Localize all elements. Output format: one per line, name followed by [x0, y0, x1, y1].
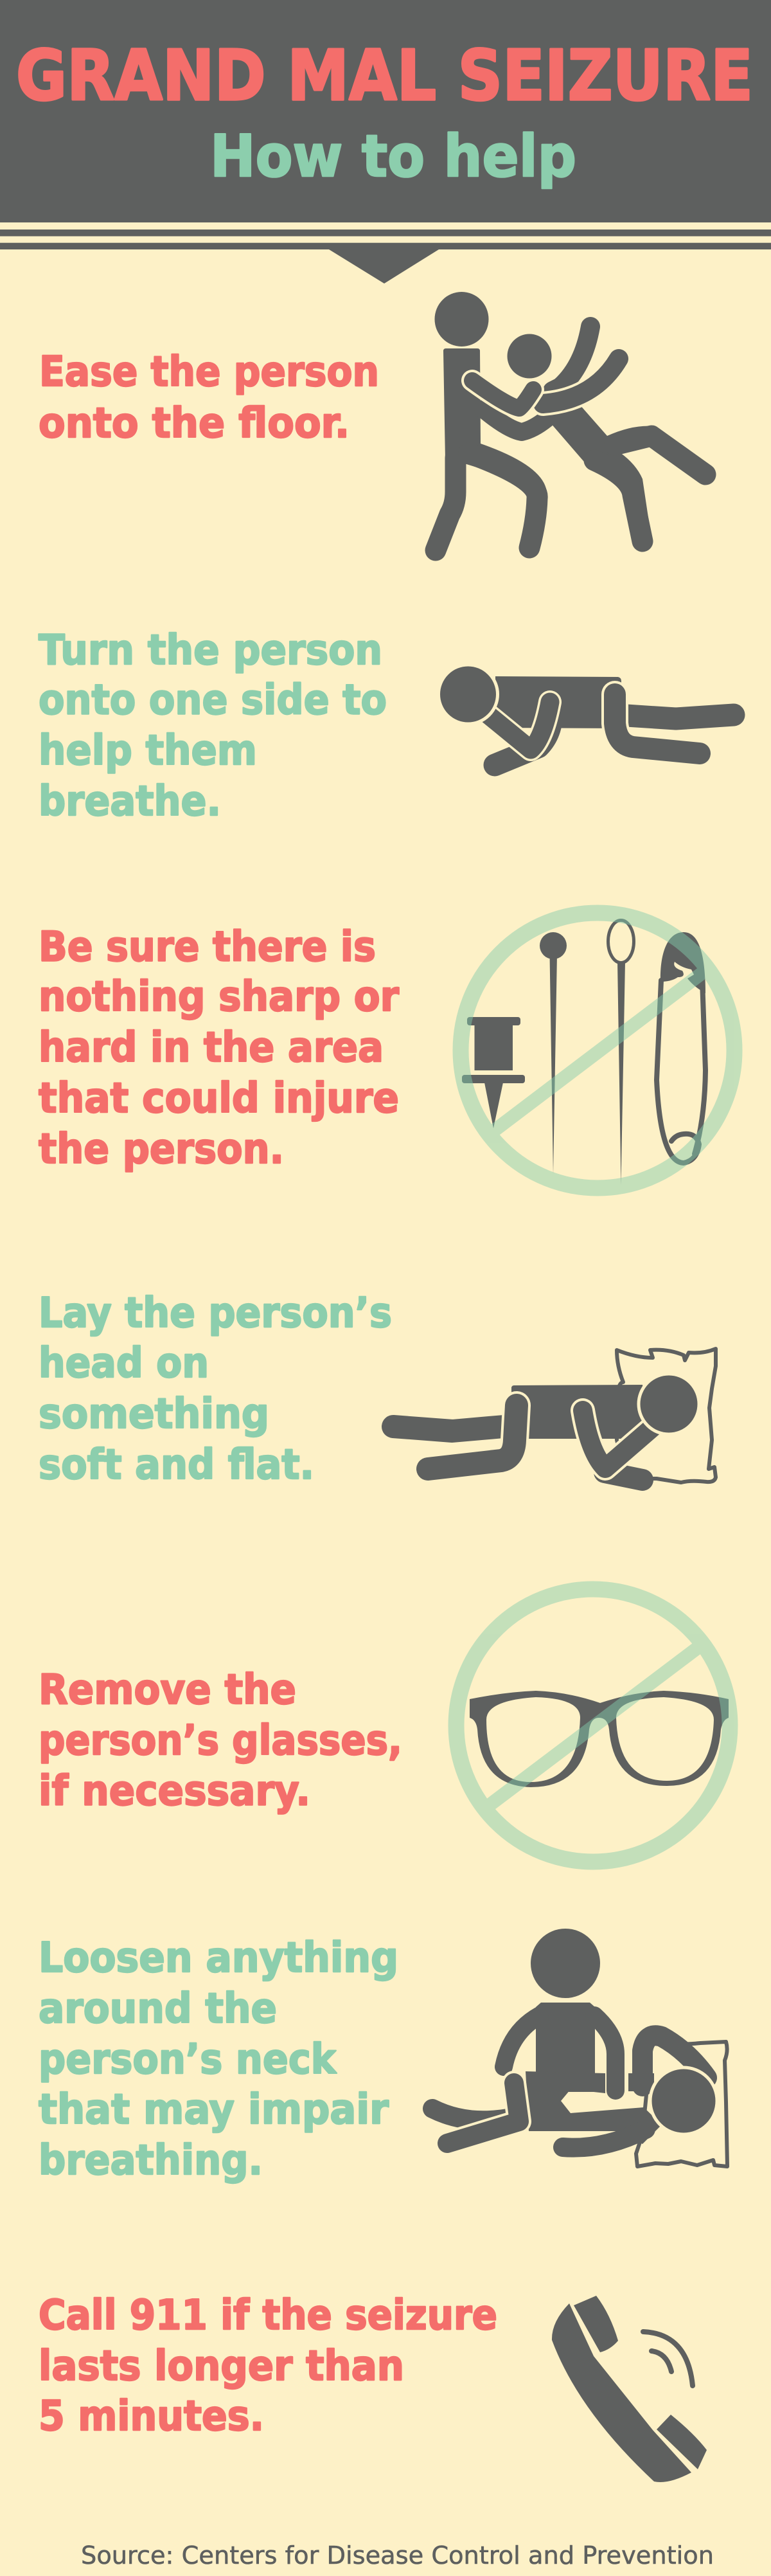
text: step 5: if necessary.: [39, 1768, 310, 1815]
source line: Source: Centers for Disease Control and Prevention: [81, 2541, 714, 2570]
text: step 1: [39, 348, 379, 447]
text: step 1: onto the floor.: [39, 400, 350, 447]
icon: hoop needle: [608, 921, 634, 1185]
icon: helper kneeling beside person on pillow: [432, 1929, 727, 2166]
icon: glasses crossed out: [456, 1589, 730, 1862]
text: step 2: Turn the person: [39, 627, 382, 674]
icon: telephone handset: [552, 2296, 707, 2482]
panel: step 3, nothing sharp or hard: [39, 913, 734, 1188]
text: step 6: Loosen anything: [39, 1934, 398, 1982]
text: step 2: help them: [39, 727, 257, 775]
icon: safety pin: [657, 932, 705, 1163]
text: step 2: onto one side to: [39, 676, 387, 724]
text: step 3: the person.: [39, 1126, 284, 1173]
text: step 5: Remove the: [39, 1666, 296, 1714]
header banner: [0, 0, 771, 284]
text: step 2: breathe.: [39, 778, 221, 825]
panel: step 6, loosen around the neck: [39, 1929, 727, 2184]
text: step 7: [39, 2292, 497, 2440]
icon: person lying with head on pillow: [393, 1349, 716, 1482]
text: step 3: nothing sharp or: [39, 973, 399, 1021]
text: step 7: lasts longer than: [39, 2343, 404, 2390]
icon: person easing another person down: [434, 292, 713, 550]
text: step 5: person’s glasses,: [39, 1717, 402, 1765]
icon: pillow: [636, 2042, 727, 2166]
panel: step 1, ease onto the floor: [39, 292, 713, 550]
icon: pillow: [616, 1349, 716, 1482]
icon: prohibition sign: [461, 913, 734, 1188]
icon: person lying on side: [438, 665, 734, 765]
icon: push pin: [462, 1017, 525, 1128]
text: step 6: person’s neck: [39, 2036, 337, 2084]
icon: kneeling helper: [504, 1929, 616, 2092]
text: step 4: Lay the person’s: [39, 1290, 392, 1337]
text: step 6: breathing.: [39, 2137, 263, 2184]
subtitle: How to help: [210, 123, 576, 190]
text: step 4: soft and flat.: [39, 1441, 314, 1489]
text: step 7: 5 minutes.: [39, 2393, 264, 2440]
text: step 7: Call 911 if the seizure: [39, 2292, 497, 2339]
text: step 3: Be sure there is: [39, 923, 376, 971]
icon: prohibition sign: [456, 1589, 730, 1862]
text: step 1: Ease the person: [39, 348, 379, 396]
text: step 4: [39, 1290, 392, 1489]
text: step 4: head on: [39, 1340, 209, 1387]
icon: round head pin: [540, 932, 567, 1174]
text: step 3: [39, 923, 399, 1173]
panel: step 5, remove glasses: [39, 1589, 730, 1862]
panel: step 7, call 911: [39, 2292, 707, 2482]
text: step 6: [39, 1934, 398, 2184]
text: step 5: [39, 1666, 402, 1815]
text: step 6: that may impair: [39, 2086, 389, 2134]
icon: glasses: [470, 1691, 729, 1787]
text: step 4: something: [39, 1391, 269, 1438]
text: step 3: that could injure: [39, 1075, 399, 1122]
panel: step 4, head on something soft: [39, 1290, 716, 1489]
panel: step 2, turn onto one side: [39, 627, 734, 825]
icon: sharp objects crossed out: [461, 913, 734, 1188]
text: step 3: hard in the area: [39, 1024, 384, 1072]
text: step 6: around the: [39, 1985, 277, 2033]
text: step 2: [39, 627, 387, 825]
